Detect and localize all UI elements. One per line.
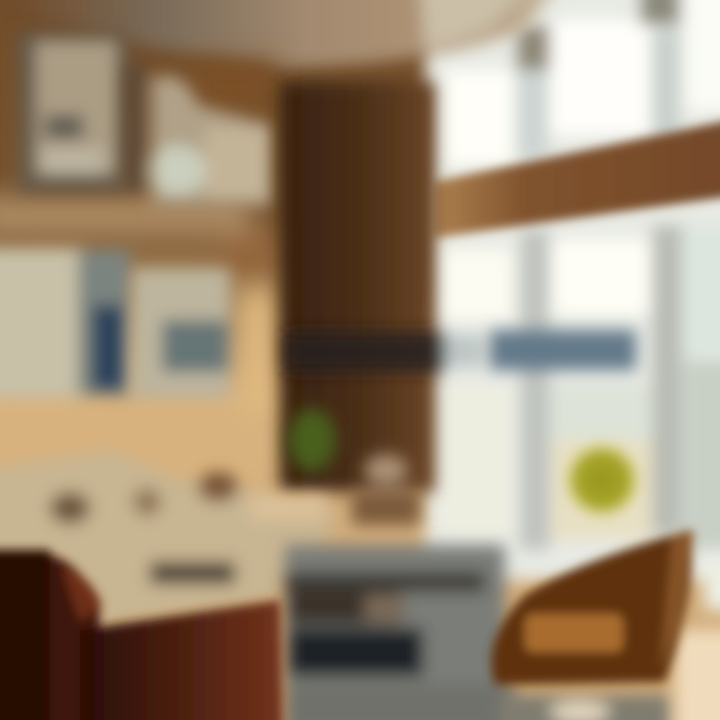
picture: upper right bbox=[126, 65, 272, 205]
panel: central wooden column bbox=[280, 82, 435, 492]
blurred caption band bbox=[285, 330, 636, 372]
picture: upper left bbox=[18, 32, 128, 192]
panel: wood wall and shelf bbox=[0, 0, 275, 485]
panel: bright windows bbox=[425, 0, 720, 580]
picture: lower right bbox=[132, 268, 230, 398]
panel: floor bbox=[500, 560, 720, 720]
icon: vase on table bbox=[352, 454, 420, 525]
panel: orange armchair bbox=[491, 530, 695, 685]
icon: green plant bbox=[288, 408, 336, 472]
panel: cushions and side table bbox=[0, 450, 330, 625]
panel: dark coffee table and rug bbox=[285, 545, 515, 720]
icon: yellow plant bbox=[560, 438, 644, 522]
panel: wooden beam bbox=[432, 118, 720, 238]
picture: lower left bbox=[0, 248, 130, 398]
panel: rust sofa bbox=[0, 550, 283, 720]
panel: ceiling bbox=[0, 0, 560, 68]
panel: framed pictures bbox=[0, 32, 272, 398]
